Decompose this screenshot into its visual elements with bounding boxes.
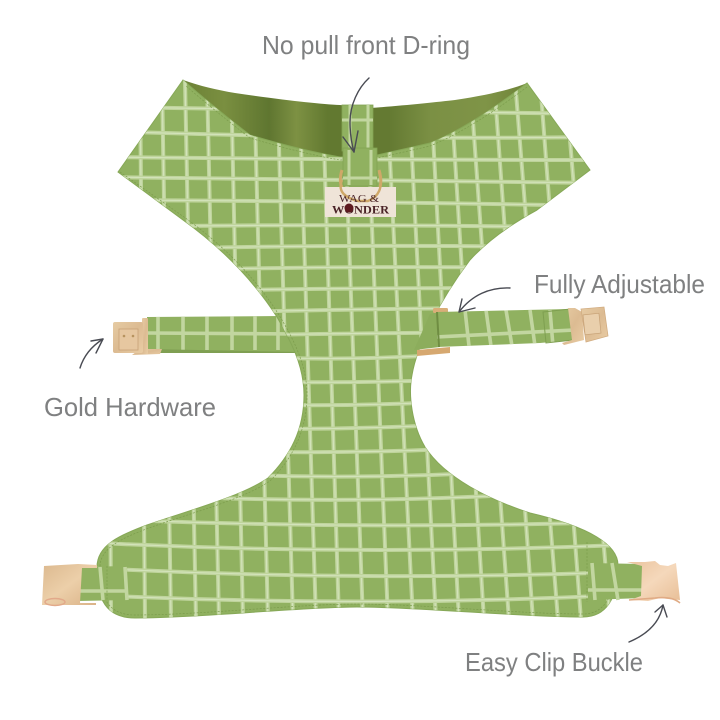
buckle: right waist — [562, 307, 608, 345]
arrow: to gold hardware — [80, 339, 103, 368]
bottom right buckle — [627, 561, 680, 603]
right slider rings — [417, 308, 450, 356]
brand label: WAG & — [339, 193, 379, 205]
harness — [42, 80, 680, 620]
arrow: to clip buckle — [629, 605, 667, 642]
label: No pull front D-ring: No pull front D-ring — [262, 30, 470, 60]
center neck loop — [342, 105, 377, 186]
left waist strap — [147, 316, 302, 353]
bottom left buckle — [42, 564, 97, 606]
arrow: to adjustable strap — [459, 288, 510, 312]
brand label: WONDER — [332, 204, 390, 216]
D-ring — [340, 170, 381, 200]
right strap fold joining the body — [414, 312, 440, 350]
buckle: left waist — [113, 318, 162, 355]
label: Easy Clip Buckle: Easy Clip Buckle — [465, 647, 643, 677]
arrow: to D-ring — [343, 78, 369, 152]
bottom right strap — [588, 563, 642, 600]
vertical plaid lines — [108, 80, 610, 620]
label: Fully Adjustable: Fully Adjustable — [534, 269, 705, 299]
harness body fabric — [90, 80, 620, 620]
neck lining — [183, 80, 527, 165]
bottom left strap — [78, 566, 128, 601]
label: Gold Hardware: Gold Hardware — [44, 392, 216, 422]
horizontal plaid lines — [90, 107, 620, 602]
right waist strap — [435, 309, 575, 347]
brand label — [325, 172, 396, 217]
